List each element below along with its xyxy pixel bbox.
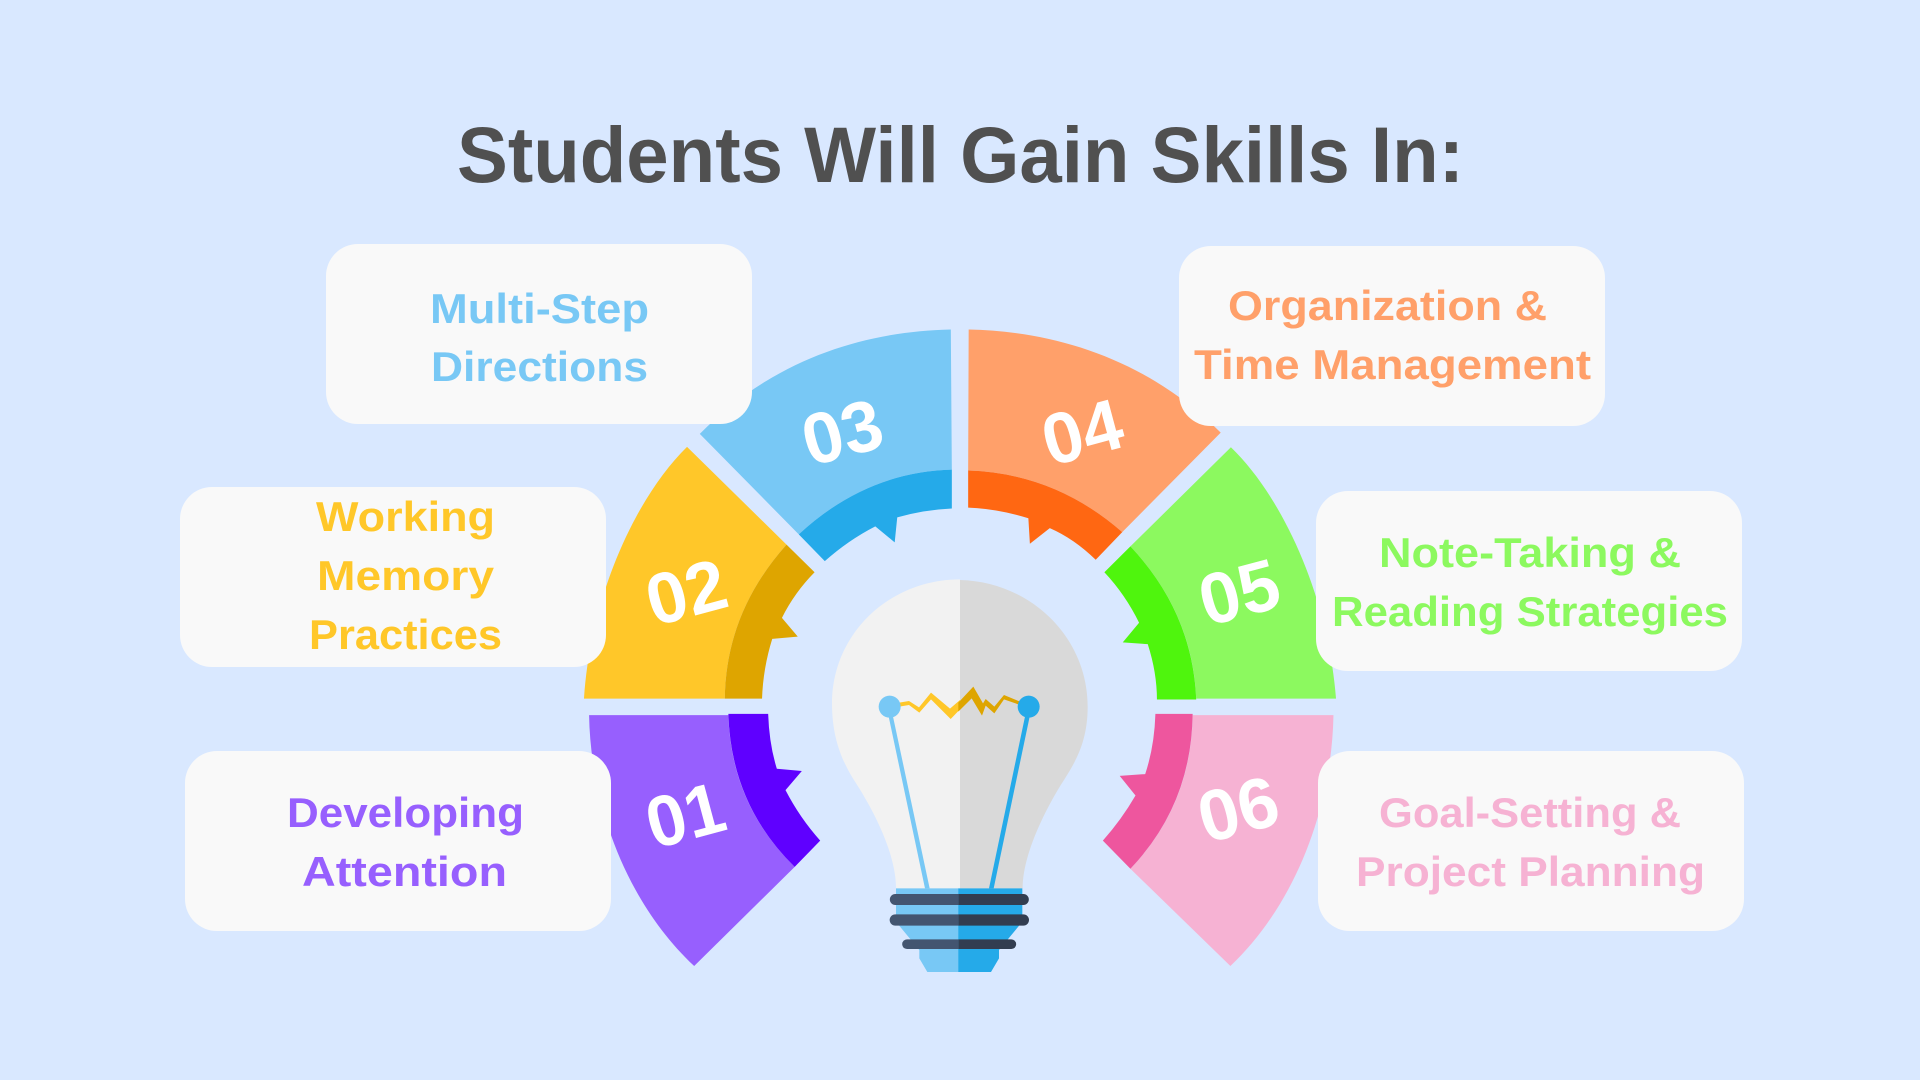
segment 01 purple bbox=[589, 714, 820, 966]
card: Note-Taking & Reading Strategies: Note-Taking & bbox=[1379, 529, 1681, 576]
card: Working Memory Practices bbox=[180, 487, 606, 667]
card: Organization & Time Management: Organization & bbox=[1228, 282, 1547, 329]
card: Goal-Setting & Project Planning: Project Planning bbox=[1356, 848, 1705, 895]
card: Developing Attention: Attention bbox=[302, 848, 507, 895]
number 04: 04 bbox=[1033, 384, 1132, 482]
card: Goal-Setting & Project Planning bbox=[1318, 751, 1744, 931]
card: Note-Taking & Reading Strategies: Reading Strategies bbox=[1332, 588, 1728, 635]
card: Multi-Step Directions: Directions bbox=[431, 343, 648, 390]
segment 04 orange bbox=[968, 329, 1221, 560]
card: Developing Attention bbox=[185, 751, 611, 931]
card: Working Memory Practices: Working bbox=[316, 493, 495, 540]
card: Multi-Step Directions: Multi-Step bbox=[430, 285, 649, 332]
number 03: 03 bbox=[793, 384, 892, 482]
wires bbox=[888, 715, 1030, 888]
card: Organization & Time Management bbox=[1179, 246, 1605, 426]
semicircle segments bbox=[584, 329, 1336, 966]
number 05: 05 bbox=[1190, 544, 1289, 642]
card: Note-Taking & Reading Strategies bbox=[1316, 491, 1742, 671]
bulb glass bbox=[832, 579, 1088, 888]
number 06: 06 bbox=[1189, 761, 1288, 859]
number 01: 01 bbox=[637, 767, 734, 865]
card: Organization & Time Management: Time Management bbox=[1194, 341, 1591, 388]
card: Multi-Step Directions bbox=[326, 244, 752, 424]
card: Goal-Setting & Project Planning: Goal-Setting & bbox=[1379, 789, 1681, 836]
segment 06 pink bbox=[1103, 714, 1333, 966]
wire contacts bbox=[879, 696, 1040, 718]
card: Working Memory Practices: Practices bbox=[309, 611, 502, 658]
segment 02 yellow bbox=[584, 447, 815, 699]
number 02: 02 bbox=[637, 544, 736, 642]
card: Working Memory Practices: Memory bbox=[317, 552, 495, 599]
card: Developing Attention: Developing bbox=[287, 789, 524, 836]
segment 05 green bbox=[1104, 447, 1336, 700]
icon: light bulb bbox=[832, 579, 1088, 972]
filament bbox=[899, 687, 1020, 719]
segment 03 light blue bbox=[700, 329, 952, 561]
title: Students Will Gain Skills In: bbox=[457, 110, 1464, 199]
bulb base bbox=[896, 888, 1022, 972]
base bands bbox=[890, 894, 1029, 949]
